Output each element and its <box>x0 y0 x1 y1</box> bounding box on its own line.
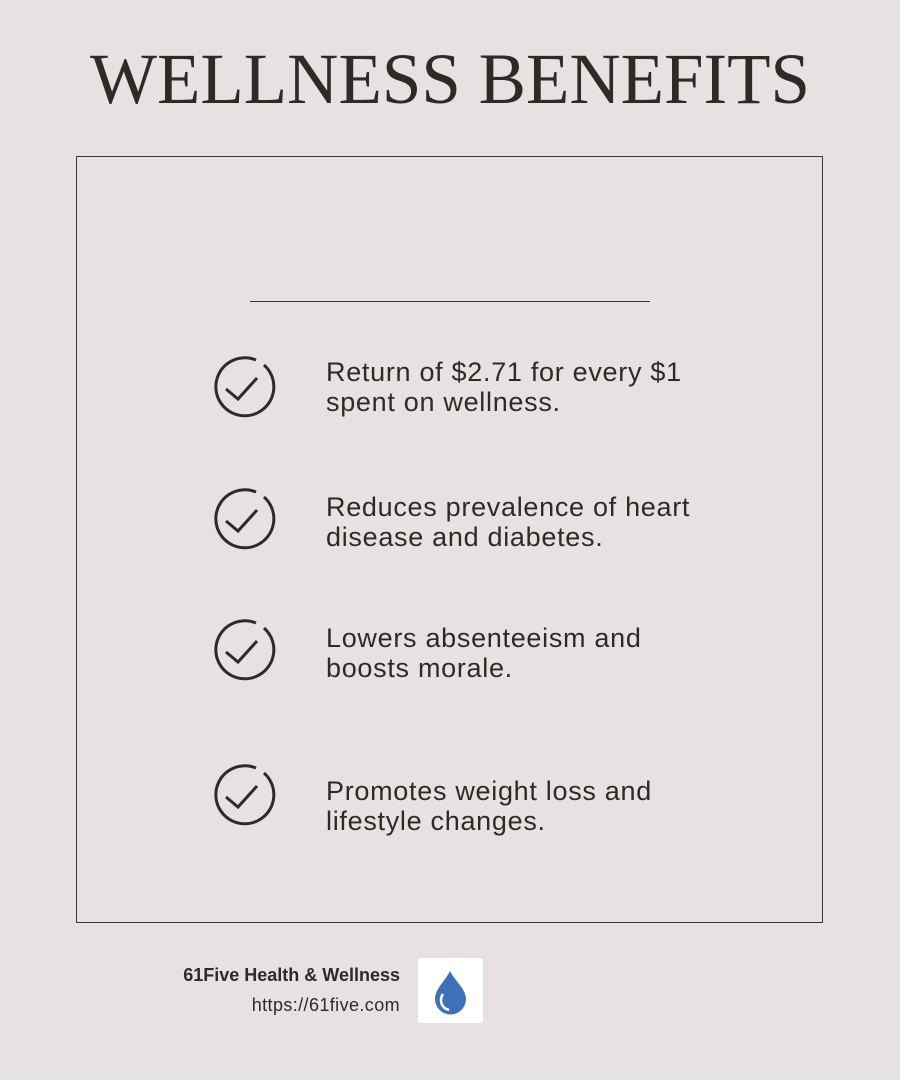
divider line <box>250 301 650 302</box>
item 1: Return of $2.71 for every $1 <box>326 357 682 387</box>
item 2 <box>214 488 690 552</box>
icon: check circle <box>214 356 276 418</box>
icon: check circle <box>214 488 276 550</box>
title: WELLNESS BENEFITS <box>90 39 810 119</box>
item 4: Promotes weight loss and <box>326 776 652 806</box>
footer brand: 61Five Health & Wellness <box>183 965 400 985</box>
icon: check circle <box>214 619 276 680</box>
item 4: lifestyle changes. <box>326 806 546 836</box>
item 1 <box>214 356 682 418</box>
item 2: disease and diabetes. <box>326 522 603 552</box>
footer brand <box>183 965 400 1015</box>
icon: logo water drop <box>418 958 483 1023</box>
item 3: Lowers absenteeism and <box>326 623 642 653</box>
icon: check circle <box>214 764 276 826</box>
item 4 <box>214 764 652 836</box>
footer brand: https://61five.com <box>252 995 400 1015</box>
item 3: boosts morale. <box>326 653 513 683</box>
panel: benefits <box>76 156 823 923</box>
item 2: Reduces prevalence of heart <box>326 492 690 522</box>
item 1: spent on wellness. <box>326 387 561 417</box>
item 3 <box>214 619 642 683</box>
